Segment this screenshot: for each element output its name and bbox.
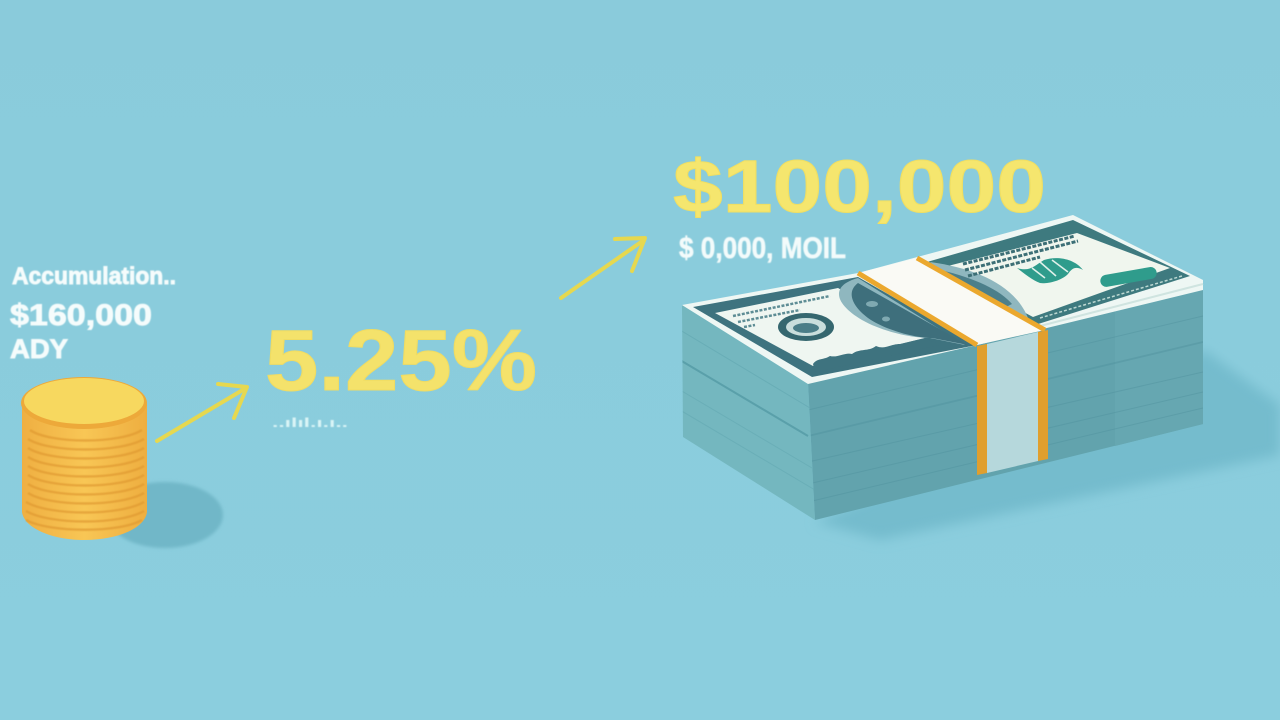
stack shadow: [815, 350, 1280, 540]
arrow: coins to rate: [157, 384, 247, 441]
green motif: [1017, 258, 1083, 283]
infographic canvas: [10, 156, 1280, 548]
heading: $100,000: $100,000: [673, 145, 1046, 228]
target amount: [673, 145, 1046, 265]
portrait left: [839, 278, 965, 345]
label: starting amount: $160,000: [10, 299, 152, 332]
green value pill: [1099, 266, 1158, 288]
portrait right: [930, 262, 1028, 330]
caption under amount: $ 0,000, MOIL: [679, 232, 846, 265]
paper sheet: [682, 215, 1203, 384]
cash stack: [680, 215, 1280, 540]
treasury seal: [778, 313, 834, 341]
arrow: rate to cash: [561, 238, 645, 298]
paper strap: [858, 258, 1048, 475]
label: starting amount: ADY: [10, 334, 68, 364]
coin stack block: [10, 263, 223, 548]
dark frame: right half: [927, 220, 1190, 325]
rate block: [265, 313, 537, 430]
coin shadow: [107, 482, 223, 548]
dark frame: left half: [693, 277, 977, 377]
sheet edges: [1040, 284, 1203, 326]
rate caption: ..ılıl.ı.ı..: [272, 415, 348, 430]
serial text lines: [733, 296, 830, 327]
lace border: [813, 338, 940, 372]
label: starting amount: Accumulation..: [12, 263, 176, 290]
left face of stack: [680, 305, 815, 520]
label: starting amount: [10, 263, 176, 364]
interest rate value: 5.25%: [265, 313, 537, 409]
icon: coin stack: [21, 377, 147, 540]
front face of stack: [808, 288, 1203, 520]
top banknote: [682, 215, 1203, 384]
